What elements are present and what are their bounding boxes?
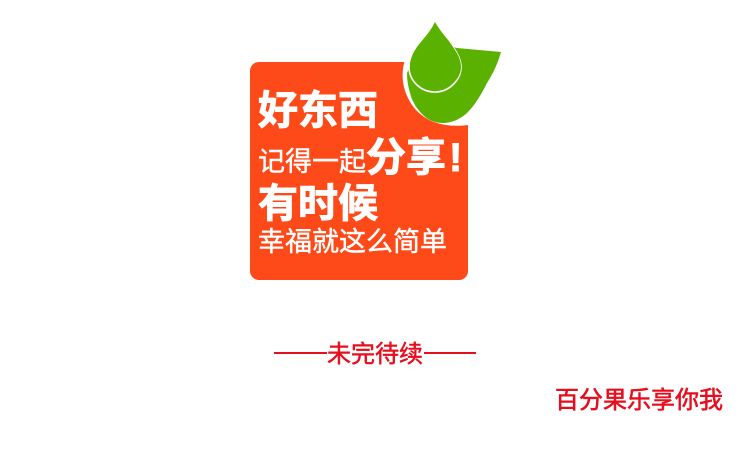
right dash xyxy=(424,352,476,354)
notch: white outline around leaf xyxy=(403,60,470,126)
text: to be continued label: 未完待续 xyxy=(327,341,423,368)
left dash xyxy=(274,352,327,354)
panel: orange rounded square xyxy=(250,62,468,280)
drop outline xyxy=(409,22,461,92)
text: exclamation mark: ! xyxy=(449,136,462,180)
text: happiness is this simple: 幸福就这么简单 xyxy=(258,227,447,257)
icon: leaf xyxy=(407,46,501,123)
badge: orange square with slogan xyxy=(250,60,470,280)
icon: green leaf and water drop xyxy=(407,22,501,123)
heading: sometimes: 有时候 xyxy=(258,182,378,226)
icon: water drop xyxy=(410,22,461,90)
text: share emphasis: 分享 xyxy=(366,136,446,180)
text: brand signature: 百分果乐享你我 xyxy=(555,387,723,414)
heading: good things: 好东西 xyxy=(258,89,378,133)
text: remember to share together: 记得一起 xyxy=(258,147,366,177)
